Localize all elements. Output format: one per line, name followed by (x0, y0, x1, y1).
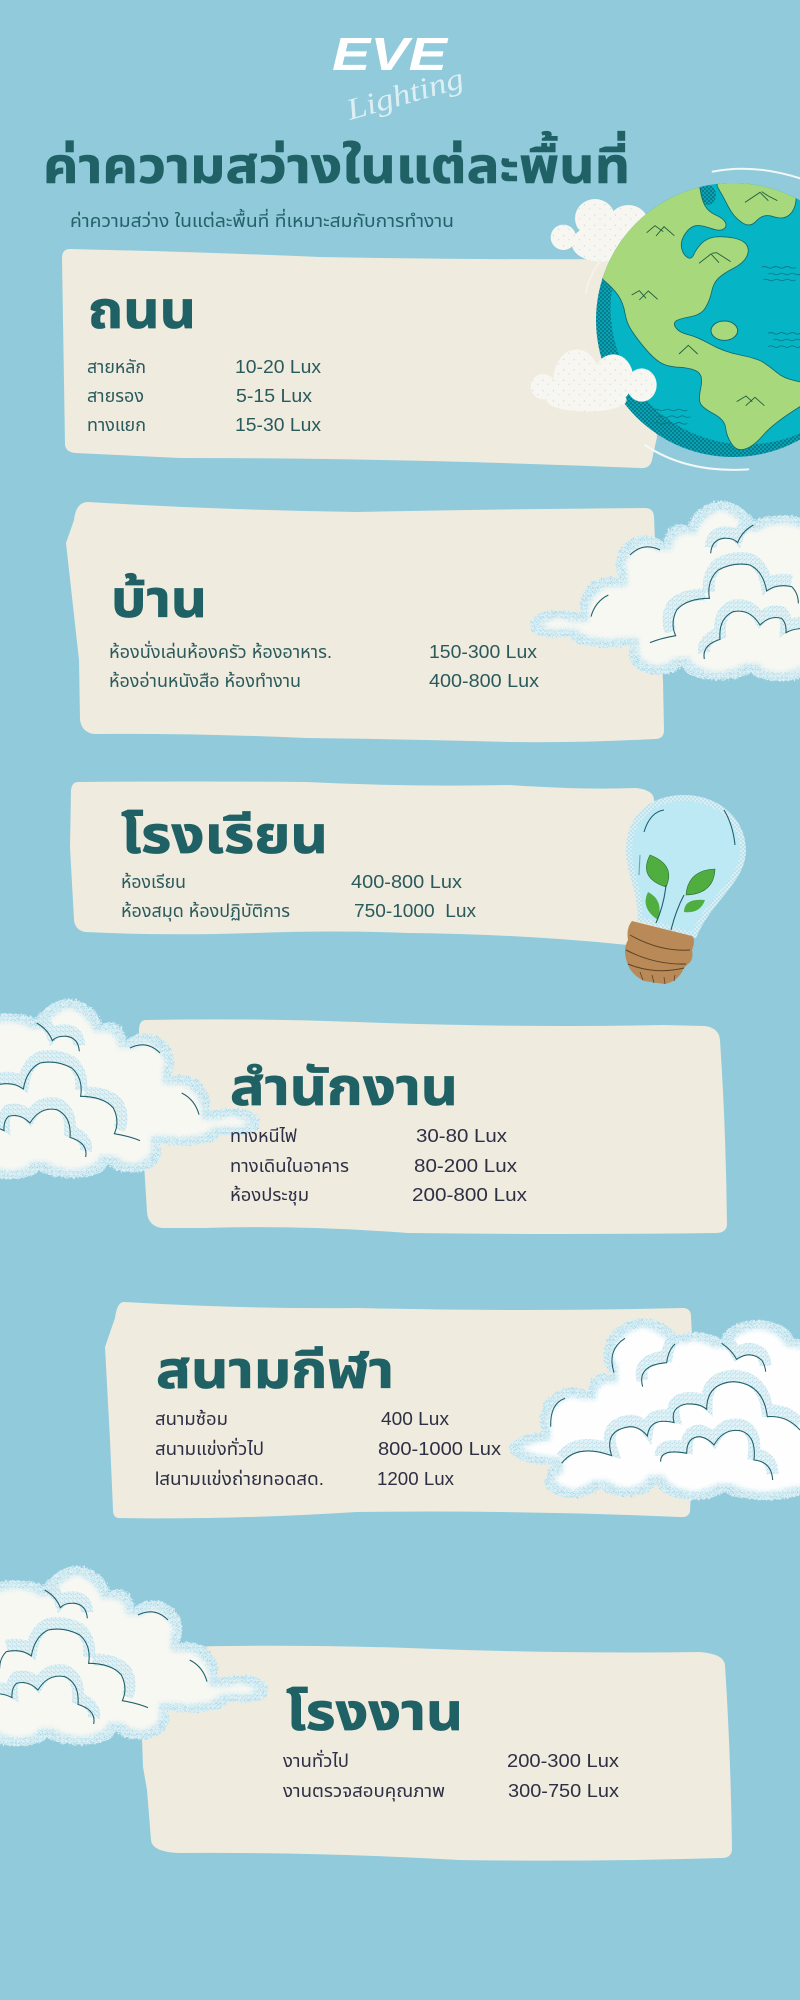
row: practice field: 400 Lux (381, 1409, 449, 1429)
row: classroom (121, 872, 462, 892)
row: meeting room: ห้องประชุม (230, 1185, 309, 1206)
panel: school (70, 782, 670, 945)
row: reading room: ห้องอ่านหนังสือ ห้องทำงาน (109, 671, 301, 691)
row: general competition (155, 1437, 501, 1459)
row: corridor: ทางเดินในอาคาร (230, 1156, 349, 1176)
row: junction (87, 415, 321, 435)
row: quality inspection (283, 1781, 619, 1802)
panel: office (0, 999, 727, 1234)
row: live broadcast competition: 1200 Lux (377, 1469, 454, 1489)
row: junction: 15-30 Lux (235, 415, 321, 435)
heading: school: โรงเรียน (121, 807, 328, 865)
row: living room (109, 640, 537, 662)
row: live broadcast competition (155, 1469, 454, 1489)
icon: globe (586, 169, 800, 470)
panel background: office (139, 1019, 727, 1234)
heading: factory: โรงงาน (286, 1684, 463, 1742)
heading: stadium: สนามกีฬา (156, 1342, 394, 1400)
cloud: stadium (509, 1319, 800, 1500)
row: main road: สายหลัก (87, 357, 146, 377)
row: meeting room: 200-800 Lux (412, 1185, 527, 1205)
row: living room: ห้องนั่งเล่นห้องครัว ห้องอาหาร. (109, 640, 332, 662)
row: reading room: 400-800 Lux (429, 671, 539, 691)
row: general work (283, 1749, 619, 1771)
row: meeting room (230, 1185, 527, 1206)
row: fire exit (230, 1126, 507, 1146)
row: quality inspection: 300-750 Lux (508, 1781, 619, 1801)
row: practice field (155, 1409, 449, 1429)
subtitle: ค่าความสว่าง ในแต่ละพื้นที่ ที่เหมาะสมกับการทำงาน (70, 208, 454, 231)
row: general work: 200-300 Lux (507, 1751, 619, 1771)
row: general competition: 800-1000 Lux (378, 1439, 501, 1459)
panel background: school (70, 782, 670, 945)
row: secondary road: 5-15 Lux (236, 386, 312, 406)
row: junction: ทางแยก (87, 415, 146, 435)
row: secondary road (87, 386, 312, 406)
row: corridor (230, 1156, 517, 1176)
row: live broadcast competition: lสนามแข่งถ่ายทอดสด. (155, 1469, 324, 1489)
row: secondary road: สายรอง (87, 386, 144, 406)
row: library: 750-1000 Lux (354, 901, 476, 921)
row: practice field: สนามซ้อม (155, 1409, 228, 1429)
row: fire exit: 30-80 Lux (416, 1126, 507, 1146)
row: reading room (109, 671, 539, 691)
panel: stadium (105, 1302, 695, 1518)
panel: factory (140, 1646, 732, 1861)
row: living room: 150-300 Lux (429, 642, 537, 662)
row: classroom: ห้องเรียน (121, 872, 186, 892)
row: main road (87, 357, 321, 377)
panel background: factory (140, 1646, 732, 1861)
row: fire exit: ทางหนีไฟ (230, 1126, 297, 1146)
row: library (121, 901, 476, 922)
heading: home: บ้าน (111, 571, 207, 629)
row: classroom: 400-800 Lux (351, 872, 462, 892)
panel background: stadium (105, 1302, 695, 1518)
row: library: ห้องสมุด ห้องปฏิบัติการ (121, 901, 290, 922)
logo: EVE Lighting (332, 28, 467, 127)
cloud: factory (0, 1566, 268, 1746)
cloud: home (530, 501, 800, 681)
row: main road: 10-20 Lux (235, 357, 321, 377)
panel: road (62, 249, 657, 468)
logo: EVE Lighting: EVE (332, 28, 449, 80)
cloud: office (0, 999, 260, 1179)
heading: road: ถนน (88, 282, 196, 340)
panel background: home (66, 502, 664, 742)
panel: home (66, 502, 664, 742)
logo: EVE Lighting: Lighting (342, 62, 467, 127)
row: general competition: สนามแข่งทั่วไป (155, 1437, 264, 1459)
cloud: globe upper (551, 199, 648, 262)
panel background: road (62, 249, 657, 468)
row: quality inspection: งานตรวจสอบคุณภาพ (283, 1781, 445, 1802)
row: general work: งานทั่วไป (283, 1749, 349, 1771)
icon: light bulb with plant (625, 795, 746, 984)
cloud: globe lower (531, 349, 657, 412)
title: ค่าความสว่างในแต่ละพื้นที่ (43, 131, 630, 194)
heading: office: สำนักงาน (230, 1059, 458, 1117)
row: corridor: 80-200 Lux (414, 1156, 517, 1176)
